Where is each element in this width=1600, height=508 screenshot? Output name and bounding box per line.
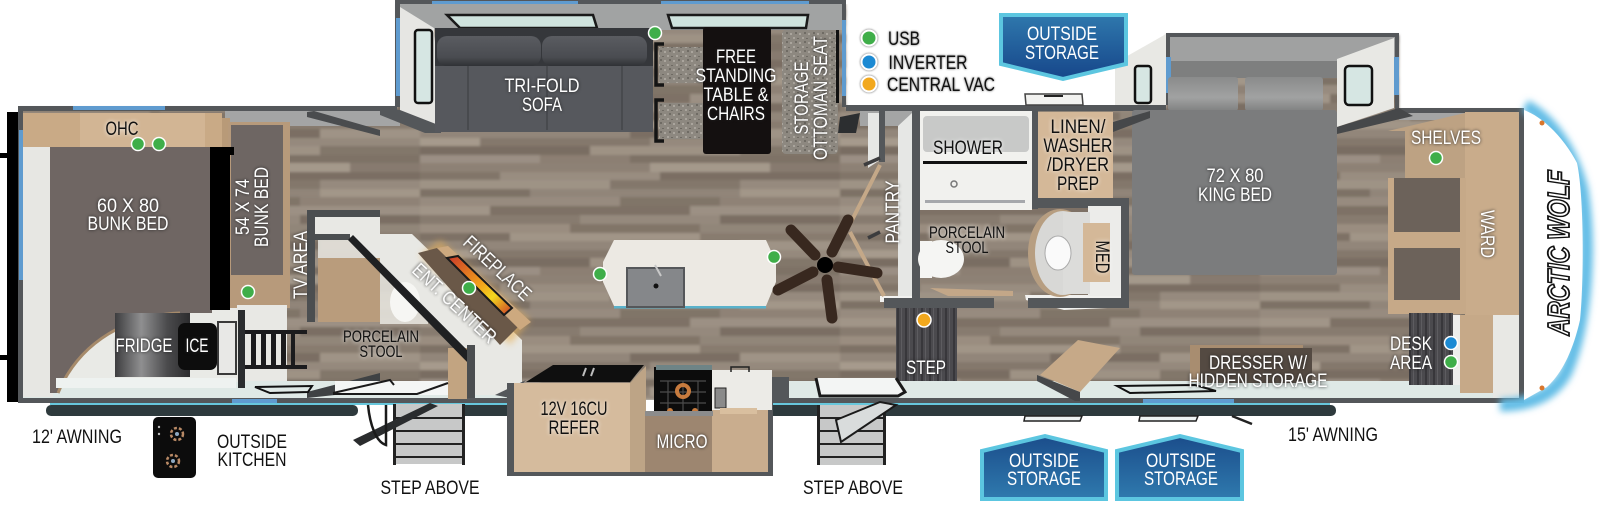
label: linen washer dryer prep [1044, 117, 1112, 195]
label: linen washer dryer prep: WASHER [1044, 136, 1112, 157]
pantry handles [864, 158, 880, 238]
right cabinet [712, 410, 768, 472]
panel: kitchen slide [495, 365, 789, 476]
window right [668, 15, 808, 28]
label: porcelain stool: STOOL [360, 342, 402, 361]
label: dresser with hidden storage: DRESSER W/ [1209, 353, 1308, 374]
white end panel [400, 7, 441, 126]
blue roof segments [396, 1, 846, 96]
label: step above right: STEP ABOVE [803, 478, 903, 499]
legend [862, 29, 995, 96]
label: 54 x 74 bunk bed [233, 167, 273, 247]
bunk surround [228, 122, 290, 308]
panel: island [603, 240, 776, 308]
grey band [400, 4, 842, 30]
outer walls [18, 105, 1524, 403]
panel: right steps [816, 378, 905, 465]
label: tri-fold sofa [504, 76, 580, 116]
label: 12 foot awning: 12' AWNING [32, 427, 122, 448]
54 x 74 bunk bed [231, 125, 283, 275]
wall above step [884, 298, 994, 308]
label: outside kitchen: OUTSIDE [217, 432, 287, 453]
icon: outside kitchen stove [153, 417, 196, 478]
awning strip left of kitchen [462, 405, 510, 416]
pantry doors [848, 165, 884, 296]
label: outside kitchen: KITCHEN [218, 450, 286, 471]
wardrobe panel top [1394, 178, 1460, 232]
bath partition [1028, 198, 1129, 308]
top shadow bands [225, 110, 1469, 136]
speckle panel [1493, 315, 1519, 398]
panel: front cap [1500, 106, 1586, 405]
bath wood trim [930, 288, 1013, 296]
label: porcelain stool bath [929, 223, 1005, 257]
white cap [1524, 110, 1583, 400]
overhead cabinet [23, 113, 230, 147]
refrigerator handles [583, 368, 594, 376]
pantry walls [868, 107, 920, 305]
panel: outside storage bottom right: STORAGE [1144, 469, 1218, 490]
white counter [712, 370, 772, 410]
bed edge curve [58, 313, 180, 393]
dark sill [380, 108, 441, 133]
label: dresser with hidden storage: HIDDEN STORAGE [1188, 371, 1328, 392]
label: 72 x 80 king bed: 72 X 80 [1206, 166, 1264, 187]
label: storage ottoman seat: OTTOMAN SEAT [811, 36, 832, 160]
end window [415, 30, 432, 103]
label: micro: MICRO [656, 432, 708, 453]
step floor [896, 305, 957, 381]
left wedge [1115, 34, 1166, 105]
panel: living room wall [307, 210, 531, 399]
ceiling band [1170, 37, 1395, 61]
legend: central vac: CENTRAL VAC [887, 75, 995, 96]
wood cabinet [318, 258, 380, 322]
legend: inverter: INVERTER [888, 53, 968, 74]
panel: closet wall [1388, 112, 1519, 398]
bath floor white [1088, 206, 1121, 296]
diagonal wall [348, 235, 475, 364]
ice maker [178, 323, 217, 370]
label: free standing table and chairs: CHAIRS [707, 104, 765, 125]
label: fireplace: FIREPLACE [459, 232, 535, 306]
label: desk area: DESK [1390, 334, 1432, 355]
label: shelves: SHELVES [1411, 128, 1481, 149]
dresser label plate [1200, 348, 1312, 383]
white floor below bed [50, 308, 240, 382]
shelves [1388, 113, 1465, 180]
dark bottom wall [467, 345, 475, 398]
shower base [920, 111, 1032, 210]
label: porcelain stool [343, 327, 419, 361]
pillow left [1168, 77, 1238, 111]
blue strip right [1394, 57, 1399, 95]
open door [353, 403, 438, 446]
table [703, 27, 771, 154]
cabinet side [630, 366, 646, 472]
panel: step [884, 295, 1129, 381]
door frame [307, 373, 448, 398]
sink [627, 268, 684, 307]
handrail [368, 405, 386, 445]
label: 60 x 80 bunk bed: 60 X 80 [97, 196, 159, 217]
label: linen washer dryer prep: /DRYER [1047, 155, 1109, 176]
left sill [1113, 111, 1150, 132]
white strip [1453, 315, 1461, 385]
label: 15 foot awning: 15' AWNING [1288, 425, 1378, 446]
label: 60 x 80 bunk bed: BUNK BED [88, 214, 168, 235]
white side panel [23, 147, 53, 397]
label: tri-fold sofa: SOFA [522, 95, 562, 116]
king bed [1132, 110, 1337, 275]
fireplace glow [420, 240, 530, 345]
left window [1135, 66, 1151, 103]
panel: left steps [307, 373, 465, 465]
label: 54 x 74 bunk bed: 54 X 74 [233, 179, 254, 235]
label: OHC: OHC [106, 119, 138, 140]
label: storage ottoman seat: STORAGE [792, 62, 813, 134]
label: tri-fold sofa: TRI-FOLD [504, 76, 580, 97]
cutting board [720, 408, 757, 414]
fold-out wood panel [1040, 340, 1120, 392]
vanity rect [1063, 212, 1090, 294]
dresser [1190, 345, 1303, 382]
fridge [115, 313, 190, 377]
label: free standing table and chairs: FREE [716, 47, 756, 68]
panel: bunk room [23, 113, 307, 397]
label: porcelain stool bath: STOOL [946, 238, 988, 257]
entry threshold [816, 378, 905, 396]
window [1117, 385, 1216, 393]
label: free standing table and chairs: TABLE & [704, 85, 769, 106]
blue wall segments [19, 106, 1234, 403]
right wedge [1337, 38, 1394, 127]
ottoman side rail [836, 30, 839, 103]
panel: bedroom slide [1113, 33, 1413, 275]
label: linen washer dryer prep: LINEN/ [1050, 117, 1106, 138]
label: med: MED [1091, 240, 1112, 274]
faucet [655, 265, 661, 276]
island trim [614, 306, 766, 308]
white appliance counter [56, 378, 236, 388]
15 foot awning bar [767, 405, 1336, 416]
storage ottoman seat [782, 30, 838, 154]
small sink [218, 322, 236, 374]
panel: outside storage bottom right [1117, 436, 1242, 499]
panel: pantry [848, 107, 920, 305]
fireplace [447, 256, 512, 315]
shower lip [925, 200, 1025, 203]
entertainment center [418, 248, 520, 345]
label: 12V 16CU refer: 12V 16CU [540, 399, 608, 420]
label: 54 x 74 bunk bed: BUNK BED [252, 167, 273, 247]
label: TV area: TV AREA [291, 231, 312, 299]
bottom light strips [23, 381, 1520, 399]
right sill [1337, 108, 1413, 134]
panel: slide-out living area [380, 0, 860, 154]
label: desk area: AREA [1390, 353, 1432, 374]
refrigerator cabinet [514, 383, 630, 472]
label: 72 x 80 king bed: KING BED [1198, 185, 1272, 206]
outlet markers [132, 26, 1458, 368]
stove [645, 365, 713, 416]
TV area wall [307, 210, 380, 322]
panel: bathroom [918, 94, 1129, 308]
bath door sill [1025, 295, 1129, 310]
dish rack [715, 388, 726, 408]
slide outline [507, 383, 773, 476]
wardrobe frame [1388, 178, 1466, 314]
label: 12V 16CU refer [540, 399, 608, 439]
shower curtain rod [923, 161, 1027, 164]
label: desk area [1390, 334, 1432, 374]
60 x 80 bunk bed [50, 147, 212, 393]
wood pillar [448, 348, 467, 399]
label: dresser with hidden storage [1188, 353, 1328, 392]
panel: outside storage bottom left: OUTSIDE [1009, 451, 1079, 472]
12 foot awning bar [46, 405, 358, 416]
label: storage ottoman seat [792, 36, 832, 160]
ward body [1465, 112, 1519, 315]
wood floor [20, 4, 1522, 400]
white TV wall [315, 217, 522, 395]
toilet tank [920, 241, 932, 278]
black divider [210, 147, 234, 310]
label: step above left: STEP ABOVE [380, 478, 480, 499]
bowl [1045, 236, 1071, 270]
panel: outside storage top: STORAGE [1025, 43, 1099, 64]
label: 60 x 80 bunk bed [88, 196, 168, 235]
toilet bowl [390, 282, 420, 322]
tri-fold sofa [435, 28, 653, 132]
orange markers [1540, 120, 1544, 390]
label: 12V 16CU refer: REFER [548, 418, 600, 439]
label: fridge: FRIDGE [116, 336, 172, 357]
headboard band [1170, 61, 1395, 78]
stove base [645, 415, 712, 472]
open door [836, 402, 896, 442]
label: porcelain stool: PORCELAIN [343, 327, 419, 346]
panel: floorplan shell [0, 4, 1524, 403]
blue strip [1166, 57, 1171, 93]
drain [654, 284, 658, 288]
door slide stub [1025, 94, 1083, 105]
label: ent. center: ENT. CENTER [407, 260, 500, 348]
white corner [475, 345, 522, 395]
label: porcelain stool bath: PORCELAIN [929, 223, 1005, 242]
stair treads [817, 405, 886, 465]
dark wall stub [495, 380, 526, 398]
toilet [918, 240, 964, 278]
mantel top [437, 246, 531, 330]
panel: dresser and fold-out [255, 340, 1312, 401]
label: pantry: PANTRY [883, 180, 904, 244]
icon: ceiling fan [778, 220, 877, 318]
label: ice: ICE [186, 336, 208, 357]
light area under diagonal wall [315, 238, 428, 324]
panel: outside storage bottom left [982, 436, 1106, 499]
right window [1345, 66, 1372, 105]
label: ward: WARD [1476, 210, 1497, 258]
chair backs [656, 44, 664, 141]
slide walls [1166, 33, 1399, 112]
stair treads [393, 404, 465, 465]
shower wall [1032, 111, 1038, 209]
refrigerator top [526, 365, 644, 382]
panel: outside storage top [1001, 15, 1126, 79]
linen cabinet [1038, 112, 1113, 198]
cutting board handle [731, 367, 749, 372]
label: outside kitchen [217, 432, 287, 471]
label: linen washer dryer prep: PREP [1057, 174, 1099, 195]
label: step: STEP [906, 358, 946, 379]
awning blue trim [50, 403, 1330, 405]
chair seats [659, 47, 703, 139]
desk [1409, 313, 1453, 385]
fold-out dark plate [1037, 375, 1080, 401]
vanity counter [1035, 211, 1091, 295]
label: free standing table and chairs: STANDING [696, 66, 776, 87]
vanity base [1028, 209, 1092, 297]
legend: USB: USB [888, 29, 920, 50]
label: 72 x 80 king bed [1198, 166, 1272, 206]
wardrobe panel bottom [1394, 248, 1460, 300]
shower drain [951, 181, 957, 187]
label: shower: SHOWER [933, 138, 1003, 159]
medicine cabinet [1083, 223, 1110, 282]
ladder and storage box [237, 305, 307, 388]
door handle [1044, 95, 1063, 97]
window left [447, 15, 597, 28]
panel: awnings [46, 403, 1336, 424]
window left [255, 386, 312, 393]
pillow right [1245, 77, 1323, 111]
wall stub right [770, 377, 789, 398]
dark wedge [838, 113, 860, 133]
blue glow [1500, 106, 1586, 405]
slide walls [395, 0, 846, 107]
desk cabinet [1460, 315, 1493, 393]
shower back wall [923, 116, 1029, 152]
storage door stubs [1024, 416, 1252, 424]
label: free standing table and chairs [696, 47, 776, 125]
rear black bumper [0, 112, 18, 402]
island counter [603, 240, 776, 306]
panel: outside storage bottom left: STORAGE [1007, 469, 1081, 490]
panel: outside storage top: OUTSIDE [1027, 24, 1097, 45]
panel: outside storage bottom right: OUTSIDE [1146, 451, 1216, 472]
logo: ARCTIC WOLF [1541, 170, 1576, 336]
